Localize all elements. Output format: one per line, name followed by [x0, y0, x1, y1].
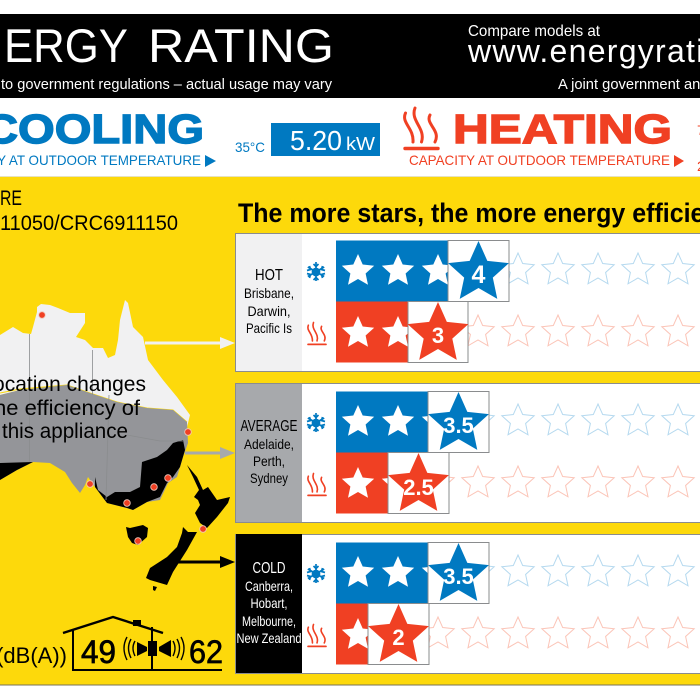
cooling rating 3.5 stars: 3.5 — [443, 413, 474, 438]
icon: heating — [308, 625, 326, 646]
heating rating 2 stars: 2 — [392, 625, 405, 650]
heating rating 2.5 stars: 2.5 — [403, 475, 434, 500]
cold label: Canberra, — [245, 578, 293, 594]
New Zealand north island — [187, 465, 230, 528]
average label — [236, 384, 302, 522]
cold label: New Zealand — [236, 630, 302, 646]
yellow panel — [0, 176, 700, 686]
title: RATING — [148, 19, 334, 72]
model text — [0, 187, 178, 235]
icon: heat waves — [405, 108, 438, 148]
hot label: Pacific Is — [246, 320, 292, 336]
hot label — [236, 234, 302, 371]
cold label: Hobart, — [250, 595, 288, 611]
panel: hot climate — [236, 234, 700, 372]
compare models text: Compare models at — [468, 23, 601, 40]
heating rating 2 stars — [336, 604, 694, 664]
title: ERGY — [4, 19, 128, 72]
heating title: HEATING — [453, 106, 672, 152]
cooling rating 3.5 stars — [336, 392, 694, 452]
cold label: Melbourne, — [242, 613, 296, 629]
cooling capacity value: kW — [346, 134, 375, 154]
heating rating 3 stars — [336, 302, 694, 362]
outdoor noise: 62 — [189, 634, 223, 670]
title — [0, 19, 334, 72]
heating capacity caption: CAPACITY AT OUTDOOR TEMPERATURE — [409, 152, 670, 168]
subtitle: to government regulations – actual usage may vary — [1, 76, 332, 93]
map of Australia and New Zealand — [0, 300, 230, 591]
cooling capacity value: 5.20 — [290, 125, 342, 156]
cooling header — [0, 106, 380, 168]
icon: cooling snowflake — [307, 413, 325, 432]
cooling capacity value — [271, 123, 380, 156]
heating temperatures — [697, 122, 700, 174]
panel: average climate — [236, 384, 700, 522]
arrow: average — [185, 447, 235, 459]
heating rating 3 stars: 3 — [432, 323, 444, 348]
icon: cooling snowflake — [307, 564, 325, 583]
average zone — [0, 385, 188, 510]
icon: heating — [308, 323, 326, 344]
arrow: hot — [145, 337, 235, 349]
icon: cooling snowflake — [307, 262, 325, 281]
header band — [0, 14, 700, 98]
indoor noise: 49 — [81, 634, 116, 670]
panel: cold climate — [236, 534, 700, 674]
model text: 11050/CRC6911150 — [0, 212, 178, 235]
cooling rating 3.5 stars: 3.5 — [443, 564, 474, 589]
cold label: COLD — [252, 560, 286, 577]
hot label: Brisbane, — [244, 285, 294, 301]
icon: speakers — [124, 637, 184, 660]
arrow: heating caption — [674, 155, 684, 167]
location caption: this appliance — [2, 420, 128, 443]
New Zealand south island — [146, 527, 197, 585]
average label: Sydney — [250, 470, 288, 486]
model text: RE — [0, 187, 22, 210]
zone boundary — [0, 385, 187, 422]
Tasmania — [126, 525, 148, 545]
arrow: cooling caption — [205, 155, 216, 167]
cold label — [236, 534, 302, 673]
cold zone: south east — [95, 440, 185, 510]
location dots — [39, 312, 206, 544]
state borders — [30, 334, 183, 500]
average label: Perth, — [253, 453, 285, 469]
hot zone — [0, 300, 190, 427]
cooling rating 4 stars — [336, 240, 694, 302]
hot label: Darwin, — [248, 303, 290, 319]
icon: heating — [308, 474, 326, 495]
cold zone: south west — [0, 462, 33, 480]
heating rating 2.5 stars — [336, 452, 694, 514]
cooling temperature: 35°C — [235, 139, 265, 155]
average label: AVERAGE — [240, 418, 298, 435]
cooling rating 3.5 stars — [336, 542, 694, 604]
cooling rating 4 stars: 4 — [472, 261, 486, 289]
heating header — [405, 106, 700, 174]
arrow: cold — [177, 556, 235, 568]
location caption — [0, 373, 146, 443]
average label: Adelaide, — [244, 436, 294, 452]
icon: house with noise levels — [63, 617, 223, 670]
hot label: HOT — [255, 267, 283, 284]
